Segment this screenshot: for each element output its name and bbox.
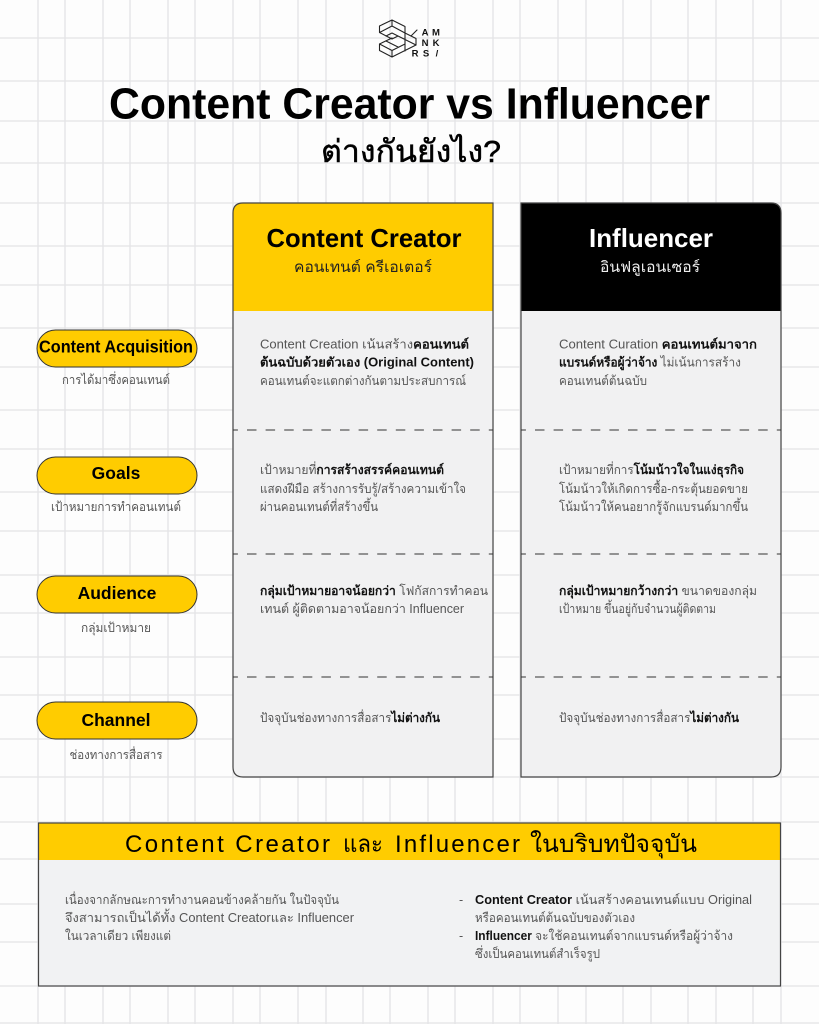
logo wordmark: K: [433, 38, 440, 49]
right list: Content Creator เน้นสร้างคอนเทนต์แบบ Original: [475, 893, 752, 907]
panel heading: Content Creator: [125, 831, 330, 858]
right list: -: [459, 893, 463, 907]
text: audience: [559, 584, 757, 617]
left text: [65, 891, 354, 943]
text: goals: [260, 461, 466, 514]
right list: Influencer จะใช้คอนเทนต์จากแบรนด์หรือผู้ว่าจ้าง: [475, 929, 733, 944]
text: acquisition: [559, 336, 757, 388]
heading: Influencer: [589, 223, 713, 253]
text: acquisition: [260, 336, 474, 388]
text: goals: เป้าหมายที่การสร้างสรรค์คอนเทนต์: [260, 461, 444, 477]
text: acquisition: คอนเทนต์จะแตกต่างกันตามประสบการณ์: [260, 374, 466, 388]
text: acquisition: คอนเทนต์ต้นฉบับ: [559, 374, 647, 388]
heading: Content Creator: [266, 223, 462, 253]
caption: ช่องทางการสื่อสาร: [70, 746, 163, 762]
panel: current context: [38, 823, 780, 986]
card header: [233, 203, 493, 311]
text: goals: เป้าหมายที่การโน้มน้าวใจในแง่ธุรกิจ: [559, 461, 744, 478]
text: goals: แสดงฝีมือ สร้างการรับรู้/สร้างความเข้าใจ: [260, 482, 466, 497]
label: goals: Goals: [92, 463, 141, 483]
left text: จึงสามารถเป็นได้ทั้ง Content Creatorและ Influencer: [65, 908, 354, 925]
logo wordmark: A: [422, 28, 429, 38]
logo wordmark: R: [412, 48, 419, 60]
logo wordmark: /: [436, 48, 439, 60]
label: content acquisition: [37, 330, 197, 387]
label: channel: [37, 702, 197, 762]
logo wordmark: N: [422, 38, 429, 49]
label: content acquisition: Content Acquisition: [39, 336, 193, 356]
text: acquisition: แบรนด์หรือผู้ว่าจ้าง ไม่เน้นการสร้าง: [559, 354, 741, 370]
card header: [521, 203, 781, 311]
text: acquisition: ต้นฉบับด้วยตัวเอง (Original Content): [260, 356, 474, 370]
panel: content creator: [233, 203, 493, 777]
caption: กลุ่มเป้าหมาย: [81, 621, 151, 636]
panel heading: Influencer: [395, 831, 520, 858]
text: channel: ปัจจุบันช่องทางการสื่อสารไม่ต่างกัน: [260, 709, 440, 726]
right list: ซึ่งเป็นคอนเทนต์สำเร็จรูป: [475, 945, 600, 962]
pill: [37, 457, 197, 494]
logo wordmark: M: [432, 28, 440, 38]
card background: [521, 203, 781, 777]
logo mark: [380, 20, 417, 57]
logo: [380, 20, 440, 60]
subheading: อินฟลูเอนเซอร์: [600, 259, 700, 276]
panel heading: ในบริบทปัจจุบัน: [530, 830, 697, 859]
text: audience: กลุ่มเป้าหมายอาจน้อยกว่า โฟกัสการทำคอน: [260, 583, 488, 599]
text: goals: โน้มน้าวให้คนอยากรู้จักแบรนด์มากขึ้น: [559, 497, 748, 515]
pill: [37, 330, 197, 367]
label: goals: [37, 457, 197, 514]
text: goals: ผ่านคอนเทนต์ที่สร้างขึ้น: [260, 497, 378, 514]
right list: [459, 893, 752, 962]
panel heading: [125, 830, 697, 859]
panel: influencer: [521, 203, 781, 777]
caption: การได้มาซึ่งคอนเทนต์: [62, 371, 170, 387]
text: audience: กลุ่มเป้าหมายกว้างกว่า ขนาดของกลุ่ม: [559, 584, 757, 599]
pill: [37, 576, 197, 613]
pill: [37, 702, 197, 739]
right list: -: [459, 929, 463, 943]
caption: เป้าหมายการทำคอนเทนต์: [51, 500, 181, 514]
subtitle: ต่างกันยังไง?: [321, 134, 501, 169]
panel background: [38, 823, 780, 986]
text: audience: [260, 583, 488, 617]
text: audience: เทนต์ ผู้ติดตามอาจน้อยกว่า Influencer: [260, 602, 464, 617]
right list: หรือคอนเทนต์ต้นฉบับของตัวเอง: [475, 911, 635, 925]
panel heading: และ: [343, 831, 383, 858]
left text: เนื่องจากลักษณะการทำงานคอนข้างคล้ายกัน ในปัจจุบัน: [65, 891, 339, 908]
left text: ในเวลาเดียว เพียงแต่: [65, 929, 171, 943]
text: acquisition: Content Creation เน้นสร้าง คอนเทนต์: [260, 336, 469, 352]
label: audience: Audience: [78, 583, 157, 603]
text: acquisition: Content Curation คอนเทนต์มาจาก: [559, 336, 757, 352]
title: Content Creator vs Influencer: [109, 80, 710, 128]
text: audience: เป้าหมาย ขึ้นอยู่กับจำนวนผู้ติดตาม: [559, 599, 716, 617]
card background: [233, 203, 493, 777]
label: channel: Channel: [81, 710, 151, 730]
subheading: คอนเทนต์ ครีเอเตอร์: [294, 259, 432, 276]
logo wordmark: S: [423, 48, 429, 60]
text: goals: โน้มน้าวให้เกิดการซื้อ-กระตุ้นยอดขาย: [559, 479, 748, 497]
panel header: [38, 823, 780, 860]
text: goals: [559, 461, 748, 515]
label: audience: [37, 576, 197, 636]
text: channel: ปัจจุบันช่องทางการสื่อสารไม่ต่างกัน: [559, 709, 739, 726]
logo wordmark: [412, 28, 440, 60]
